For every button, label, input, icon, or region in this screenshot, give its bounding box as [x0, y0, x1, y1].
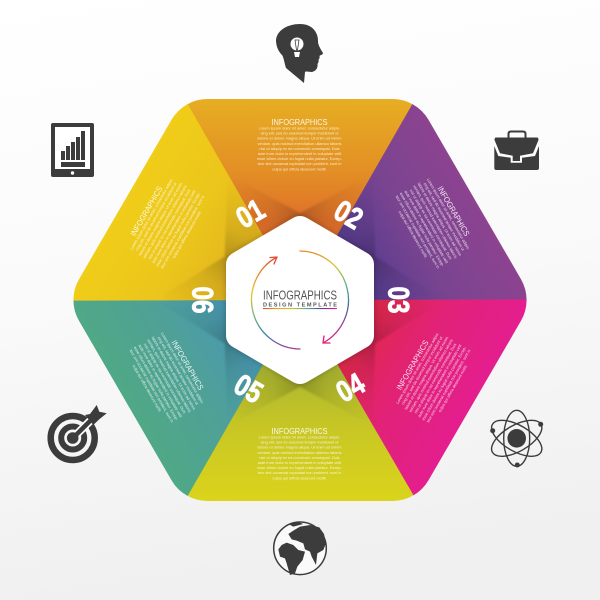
text block: teal sector: cing elit, sed do eiusmod tempor incididunt ut — [157, 336, 200, 406]
icon: head with light bulb — [276, 24, 323, 83]
text block: yellow sector: labore et dolore magna aliqua. Ut enim ad minim — [137, 182, 183, 257]
text block: teal sector: nisi ut aliquip ex ea commodo consequat. Duis — [143, 342, 187, 414]
number 03: 03 — [382, 286, 414, 314]
sector 01: orange — [186, 99, 414, 236]
sector 02: purple — [337, 104, 527, 300]
text block: lime sector: labore et dolore magna aliqua. Ut enim ad minim — [258, 445, 341, 450]
text block: lime sector: INFOGRAPHICS — [272, 427, 328, 436]
text block: teal sector: Lorem ipsum dolor sit amet, consectetur adipis- — [160, 331, 206, 405]
text block: purple sector: nisi ut aliquip ex ea commodo consequat. Duis — [409, 188, 453, 260]
text block: magenta sector — [388, 326, 476, 426]
text block: magenta sector: culpa qui officia deserunt mollit. — [437, 364, 468, 413]
text block: lime sector: Lorem ipsum dolor sit amet, consectetur adipis- — [259, 434, 341, 440]
icon: tablet with bar chart — [51, 123, 94, 177]
text block: orange sector: culpa qui officia deserunt mollit. — [272, 166, 327, 171]
hexagon wheel of six coloured sectors — [65, 96, 535, 504]
text block: yellow sector: INFOGRAPHICS — [129, 185, 165, 238]
number 04: 04 — [331, 367, 371, 409]
text block: teal sector: INFOGRAPHICS — [169, 339, 205, 392]
sector 03: magenta — [337, 299, 527, 496]
text block: lime sector: culpa qui officia deserunt mollit. — [272, 475, 327, 480]
text block: orange sector: teur sint occaecat cupidatat non proident, sunt in — [258, 161, 341, 166]
number 06: 06 — [186, 286, 218, 314]
text block: purple sector — [390, 172, 479, 273]
text block: purple sector: Lorem ipsum dolor sit amet, consectetur adipis- — [426, 177, 472, 251]
text block: purple sector: teur sint occaecat cupidatat non proident, sunt in — [395, 194, 441, 269]
text block: yellow sector: Lorem ipsum dolor sit amet, consectetur adipis- — [129, 177, 174, 251]
text block: orange sector: veniam, quis nostrud exercitation ullamco laboris — [258, 141, 342, 146]
text block: teal sector: labore et dolore magna aliqua. Ut enim ad minim — [151, 336, 197, 411]
text block: purple sector: labore et dolore magna aliqua. Ut enim ad minim — [417, 182, 463, 257]
text block: yellow sector: esse cillum dolore eu fugiat nulla pariatur. Excep- — [155, 191, 202, 267]
text block: lime sector: veniam, quis nostrud exercitation ullamco laboris — [258, 450, 342, 455]
text block: orange sector: nisi ut aliquip ex ea commodo consequat. Duis — [259, 146, 340, 151]
text block: yellow sector: veniam, quis nostrud exercitation ullamco laboris — [142, 184, 188, 259]
icon: atom — [486, 410, 547, 468]
text block: orange sector: cing elit, sed do eiusmod tempor incididunt ut — [261, 131, 339, 136]
sector 04: lime — [186, 364, 414, 501]
text block: magenta sector: esse cillum dolore eu fugiat nulla pariatur. Excep- — [421, 345, 468, 421]
sector 05: teal — [73, 300, 263, 496]
text block: orange sector: aute irure dolor in reprehenderit in voluptate velit — [258, 151, 342, 156]
text block: yellow sector: cing elit, sed do eiusmod tempor incididunt ut — [134, 181, 178, 252]
text block: orange sector: INFOGRAPHICS — [272, 118, 328, 127]
text block: magenta sector: nisi ut aliquip ex ea commodo consequat. Duis — [413, 342, 457, 414]
text block: lime sector: cing elit, sed do eiusmod tempor incididunt ut — [261, 440, 339, 445]
circular arrow: right — [300, 251, 349, 343]
text block: yellow sector: nisi ut aliquip ex ea commodo consequat. Duis — [147, 188, 191, 260]
text block: orange sector: labore et dolore magna aliqua. Ut enim ad minim — [258, 136, 341, 141]
icon: target with arrow — [51, 405, 107, 460]
text block: yellow sector — [122, 172, 210, 272]
text block: lime sector: aute irure dolor in reprehenderit in voluptate velit — [258, 460, 342, 465]
icon: globe — [274, 522, 326, 575]
circular arrow: left — [251, 257, 300, 349]
text block: yellow sector: aute irure dolor in reprehenderit in voluptate velit — [150, 189, 197, 264]
centre title: INFOGRAPHICS — [263, 288, 337, 302]
text block: magenta sector: teur sint occaecat cupidatat non proident, sunt in — [425, 348, 471, 423]
text block: lime sector — [257, 427, 343, 480]
text block: teal sector: teur sint occaecat cupidatat non proident, sunt in — [129, 348, 175, 423]
text block: orange sector: Lorem ipsum dolor sit amet, consectetur adipis- — [259, 126, 341, 130]
text block: magenta sector: Lorem ipsum dolor sit amet, consectetur adipis- — [395, 331, 440, 405]
number 05: 05 — [228, 368, 268, 410]
icon: briefcase — [494, 132, 539, 170]
text block: magenta sector: veniam, quis nostrud exercitation ullamco laboris — [408, 338, 454, 413]
text block: orange sector: esse cillum dolore eu fugiat nulla pariatur. Excep- — [257, 156, 343, 161]
number 01: 01 — [231, 193, 271, 235]
text block: magenta sector: cing elit, sed do eiusmod tempor incididunt ut — [400, 335, 444, 406]
text block: teal sector: esse cillum dolore eu fugiat nulla pariatur. Excep- — [133, 345, 180, 422]
text block: orange sector — [257, 118, 343, 171]
text block: yellow sector: culpa qui officia deserunt mollit. — [171, 210, 202, 259]
rainbow rule — [263, 308, 337, 309]
text block: magenta sector: labore et dolore magna aliqua. Ut enim ad minim — [403, 336, 449, 411]
text block: magenta sector: INFOGRAPHICS — [395, 339, 431, 392]
text block: teal sector — [124, 326, 213, 427]
text block: purple sector: INFOGRAPHICS — [435, 185, 471, 238]
text block: teal sector: aute irure dolor in reprehenderit in voluptate velit — [137, 343, 184, 419]
text block: purple sector: aute irure dolor in reprehenderit in voluptate velit — [403, 189, 450, 265]
centre subtitle: DESIGN TEMPLATE — [263, 302, 337, 308]
text block: purple sector: esse cillum dolore eu fugiat nulla pariatur. Excep- — [399, 191, 446, 268]
number 02: 02 — [328, 194, 368, 236]
text block: lime sector: teur sint occaecat cupidatat non proident, sunt in — [258, 470, 341, 475]
centre white hexagon — [226, 216, 374, 384]
text block: lime sector: nisi ut aliquip ex ea commodo consequat. Duis — [259, 455, 340, 460]
text block: magenta sector: aute irure dolor in reprehenderit in voluptate velit — [416, 343, 463, 418]
sector 06: yellow — [73, 104, 263, 301]
text block: purple sector: cing elit, sed do eiusmod tempor incididunt ut — [423, 182, 466, 252]
text block: yellow sector: teur sint occaecat cupidatat non proident, sunt in — [159, 194, 205, 269]
text block: purple sector: veniam, quis nostrud exercitation ullamco laboris — [412, 184, 459, 259]
text block: purple sector: culpa qui officia deserunt mollit. — [398, 210, 429, 259]
text block: lime sector: esse cillum dolore eu fugiat nulla pariatur. Excep- — [257, 465, 343, 470]
text block: teal sector: veniam, quis nostrud exercitation ullamco laboris — [146, 338, 193, 413]
text block: teal sector: culpa qui officia deserunt mollit. — [132, 364, 163, 413]
